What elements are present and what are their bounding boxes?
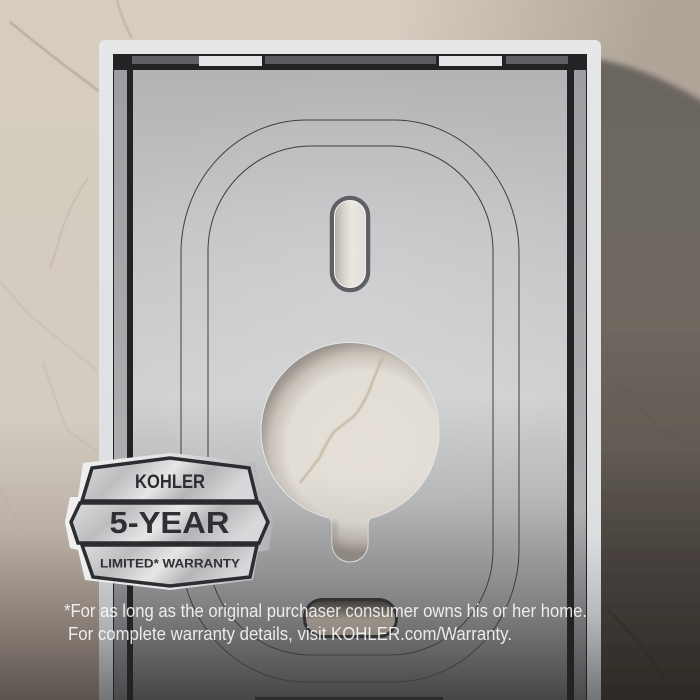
top channel right section [506,56,568,64]
mounting plate outlines [181,120,519,682]
badge bottom panel [82,545,257,586]
inner recess [113,54,587,700]
right channel [574,70,586,700]
badge outer rim [65,453,273,590]
inner outline [208,146,493,655]
upper slot opening [332,198,368,290]
cast shadow on right wall [590,58,700,700]
left channel [114,70,127,700]
top channel left section [132,56,199,64]
outer outline [181,120,519,682]
warranty footnote [64,601,587,644]
round keyhole opening [260,342,440,566]
warranty label: LIMITED* WARRANTY [100,556,240,570]
marble vein [300,357,383,483]
warranty length: 5-YEAR [110,505,230,540]
back panel [133,70,567,700]
fixture frame [99,40,601,700]
top left tab [199,56,262,66]
badge top panel [82,458,257,501]
warranty badge [65,453,273,590]
footnote line 1: *For as long as the original purchaser consumer owns his or her home. [64,601,587,621]
top right tab [439,56,502,66]
footnote line 2: For complete warranty details, visit KOHLER.com/Warranty. [68,624,512,644]
bottom dark bar [255,697,443,700]
lower shading [307,508,394,562]
top channel center section [265,56,436,64]
lower slot opening [304,600,396,636]
badge middle panel [71,503,268,543]
brand name: KOHLER [135,472,205,493]
keyhole neck shadow [331,520,339,558]
